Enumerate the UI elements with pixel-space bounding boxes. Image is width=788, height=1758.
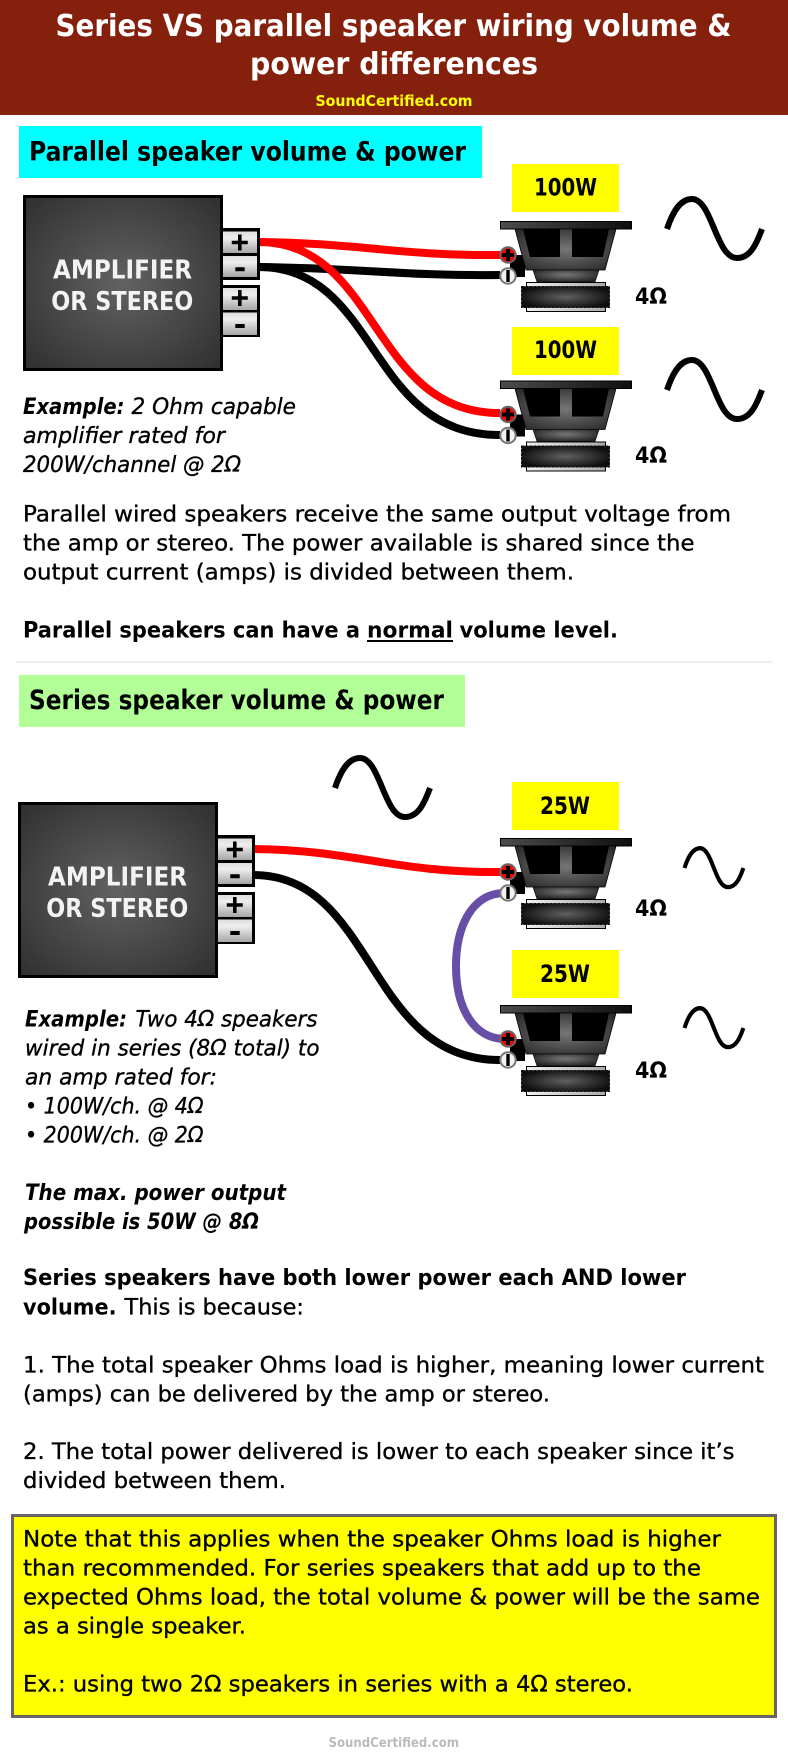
- heading: series: Series speaker volume & power: [29, 685, 444, 716]
- example text: series: Two 4Ω speakers: [136, 1007, 318, 1033]
- callout: note: Ex.: using two 2Ω speakers in series with a 4Ω stereo.: [23, 1672, 633, 1698]
- heading: parallel: Parallel speaker volume & power: [29, 137, 466, 168]
- speaker 2: parallel: [500, 381, 632, 471]
- callout: note: Note that this applies when the speaker Ohms load is higher: [23, 1527, 722, 1553]
- callout: note: [12, 1516, 776, 1716]
- title: power differences: [250, 47, 538, 82]
- example text: series: • 100W/ch. @ 4Ω: [25, 1094, 204, 1120]
- heading: parallel: [19, 126, 482, 178]
- title: Series VS parallel speaker wiring volume &: [56, 9, 732, 44]
- wires: parallel: [258, 242, 500, 435]
- power label: 100W bottom: [512, 327, 619, 375]
- title: [56, 9, 732, 82]
- amplifier: parallel: AMPLIFIER: [53, 255, 192, 285]
- speaker 1: parallel: [500, 222, 632, 312]
- conclusion: parallel: [23, 618, 618, 644]
- icon: sine wave bottom: [667, 360, 762, 419]
- heading: series: [19, 675, 465, 727]
- wires: series: [253, 849, 505, 1060]
- speaker 2: series: [500, 1006, 632, 1096]
- power label: 25W bottom: [512, 950, 619, 998]
- callout: note: than recommended. For series speakers that add up to the: [23, 1556, 701, 1582]
- amplifier: parallel: [24, 196, 260, 370]
- conclusion: parallel: volume level.: [460, 618, 618, 644]
- text block: series explanation: (amps) can be delivered by the amp or stereo.: [23, 1382, 550, 1408]
- example text: parallel: [23, 394, 296, 478]
- text block: parallel explanation: output current (amps) is divided between them.: [23, 560, 574, 586]
- power label: 100W bottom: 100W: [534, 336, 597, 364]
- icon: small sine wave top: [684, 848, 743, 887]
- icon: sine wave top: [667, 199, 762, 258]
- callout: note: expected Ohms load, the total volume & power will be the same: [23, 1585, 760, 1611]
- panel: series wiring: [19, 675, 764, 1494]
- text block: series explanation: 2. The total power delivered is lower to each speaker since it’s: [23, 1439, 734, 1465]
- title banner: [0, 0, 788, 115]
- conclusion: parallel: normal: [367, 618, 453, 644]
- example text: series: Example:: [25, 1007, 127, 1033]
- text block: series explanation: [23, 1265, 764, 1494]
- text block: series explanation: volume.: [23, 1295, 116, 1321]
- footer credit: SoundCertified.com: [328, 1735, 459, 1751]
- text block: parallel explanation: [23, 502, 731, 586]
- text block: series explanation: This is because:: [124, 1295, 304, 1321]
- icon: sine wave amp output: [335, 758, 430, 817]
- example text: series: wired in series (8Ω total) to: [25, 1036, 320, 1062]
- example text: parallel: amplifier rated for: [23, 423, 227, 449]
- text block: parallel explanation: Parallel wired speakers receive the same output voltage from: [23, 502, 731, 528]
- conclusion: parallel: Parallel speakers can have a: [23, 618, 360, 644]
- amplifier: series: AMPLIFIER: [48, 862, 187, 892]
- amplifier: parallel: OR STEREO: [51, 287, 193, 317]
- impedance label top: 4Ω: [635, 285, 667, 310]
- example text: parallel: 200W/channel @ 2Ω: [23, 452, 241, 478]
- text block: series explanation: 1. The total speaker Ohms load is higher, meaning lower current: [23, 1353, 764, 1379]
- icon: small sine wave bottom: [684, 1008, 743, 1047]
- callout: note: as a single speaker.: [23, 1614, 246, 1640]
- example text: parallel: Example:: [23, 394, 124, 420]
- power label: 25W bottom: 25W: [540, 960, 590, 988]
- example text: series: [23, 1007, 319, 1235]
- panel: parallel wiring: [19, 126, 762, 644]
- example text: series: • 200W/ch. @ 2Ω: [25, 1123, 204, 1149]
- amplifier: series: OR STEREO: [46, 894, 188, 924]
- impedance label bottom: 4Ω: [635, 1059, 667, 1084]
- example text: series: The max. power output: [25, 1180, 287, 1206]
- site name: SoundCertified.com: [316, 92, 472, 110]
- impedance label bottom: 4Ω: [635, 444, 667, 469]
- example text: series: an amp rated for:: [25, 1065, 217, 1091]
- text block: series explanation: Series speakers have both lower power each AND lower: [23, 1265, 687, 1291]
- power label: 25W top: [512, 782, 619, 830]
- amplifier: series: [20, 804, 255, 976]
- text block: parallel explanation: the amp or stereo. The power available is shared since the: [23, 531, 695, 557]
- power label: 25W top: 25W: [540, 792, 590, 820]
- speaker 1: series: [500, 838, 632, 928]
- text block: series explanation: divided between them.: [23, 1468, 286, 1494]
- impedance label top: 4Ω: [635, 897, 667, 922]
- example text: parallel: 2 Ohm capable: [132, 394, 296, 420]
- power label: 100W top: [512, 164, 619, 212]
- power label: 100W top: 100W: [534, 174, 597, 202]
- example text: series: possible is 50W @ 8Ω: [23, 1209, 259, 1235]
